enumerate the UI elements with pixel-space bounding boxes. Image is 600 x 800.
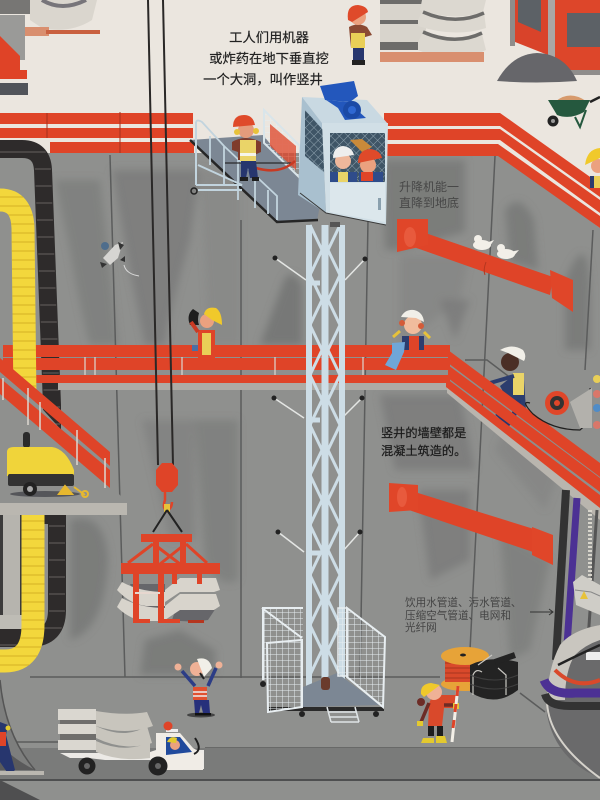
heading: shaft explanation: 一个大洞，叫作竖井 [203,72,323,87]
crane hook block [153,463,182,532]
yellow ventilation duct, upper [0,200,25,400]
text: utilities note: 压缩空气管道、电网和 [405,609,511,622]
wall seams [10,155,593,748]
text: lift note: 升降机能一 [399,180,459,194]
compressor [7,432,88,497]
lift tower lattice [306,225,342,695]
worker guiding with raised arms [174,658,222,718]
wall stains [55,160,590,675]
black and purple service pipes [556,490,597,660]
worker on phone at middle rail [189,308,222,358]
surface: stacked segments and crane base, top left [0,0,100,95]
black flexible duct [0,149,57,638]
lifting frame [121,534,220,623]
left diagonal rail [0,358,110,488]
red wall bracket [397,219,573,312]
partial worker with yellow helmet at right edge [585,148,600,188]
lower-left tunnel edge with worker [0,680,44,800]
text: concrete wall note: 混凝土筑造的。 [381,443,466,458]
middle red walkway rail [3,345,450,390]
arrow: utilities note to pipes [530,609,553,615]
worker with white helmet on diagonal walkway [490,346,526,425]
white doves on bracket [473,235,519,259]
orange cable drum [441,647,489,691]
lift cage car [298,97,388,227]
top red barrier fence, right [384,113,600,228]
yellow ventilation duct, lower [0,515,33,661]
platform worker with red helmet [232,115,261,181]
worker holding measuring pole [417,683,459,743]
surface: red site huts [510,0,600,75]
diagonal walkway rail, right [446,350,600,520]
workers inside lift car [330,139,383,182]
blue lift motor [320,81,366,120]
segment transport truck [58,709,204,776]
black cable coil [470,655,518,700]
tunnel boring machine ring with hoses [544,625,600,778]
heading: shaft explanation: 工人们用机器 [229,30,309,45]
pigeon [100,242,139,276]
top red barrier fence, left [0,112,194,153]
crane cables [148,0,173,465]
surface: gravel heap [497,53,577,82]
left platform with compressor deck [0,362,127,629]
surface: stacked tunnel segments on pallet [380,0,486,62]
text: utilities note: 饮用水管道、污水管道、 [405,596,522,609]
text: lift note: 直降到地底 [399,195,459,210]
access gangway platform [190,110,320,222]
ground cage at lift base [260,608,385,722]
heading: shaft explanation: 或炸药在地下垂直挖 [209,51,329,66]
orange cable reel and black lead [526,388,591,430]
shaft floor band [0,748,600,800]
worker with blueprint, blonde braids [385,310,430,370]
grey junction panel with connectors [570,375,600,429]
text: concrete wall note: 竖井的墙壁都是 [381,425,466,440]
text: utilities note: 光纤网 [405,621,437,634]
lower red wall bracket [389,483,553,565]
surface worker carrying segment [348,5,372,65]
electrical box [573,575,600,615]
suspended tunnel segments [117,578,220,622]
surface: green wheelbarrow [548,96,600,127]
tower bracing wires [272,256,368,552]
